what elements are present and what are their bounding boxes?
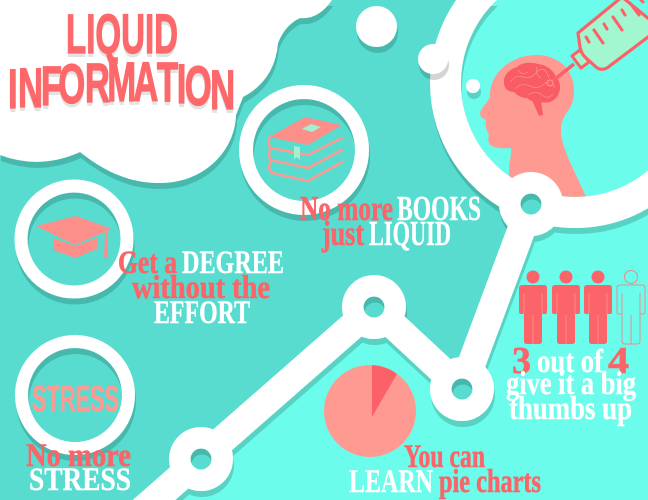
person 1 <box>519 270 547 344</box>
text: no more stress: STRESS <box>29 462 131 498</box>
text: 3 out of 4 give it a big thumbs up <box>506 340 636 427</box>
title text <box>8 2 235 121</box>
title text: INFORMATION <box>8 51 235 121</box>
text: 3 out of 4 give it a big thumbs up: 4 <box>608 340 629 382</box>
icon: books <box>269 117 342 181</box>
icon: head with brain and syringe <box>480 0 648 205</box>
text: you can learn pie charts: You can <box>404 439 485 475</box>
text: 3 out of 4 give it a big thumbs up: 3 <box>512 340 531 382</box>
bookmark <box>294 146 300 160</box>
text: get a degree without the effort: without the <box>132 270 270 306</box>
text: 3 out of 4 give it a big thumbs up: out of <box>537 344 604 380</box>
graph nodes <box>499 172 563 236</box>
text: get a degree without the effort: DEGREE <box>182 245 284 281</box>
magnifier ring <box>446 0 648 212</box>
book cover <box>269 117 342 145</box>
pie wedge <box>372 365 397 417</box>
cap tassel <box>104 232 108 258</box>
text: no more books just liquid: LIQUID <box>369 214 451 253</box>
text: get a degree without the effort: EFFORT <box>154 295 250 331</box>
person 4 outline <box>617 270 645 344</box>
head silhouette <box>480 55 590 205</box>
thought bubbles <box>356 6 480 93</box>
person 3 <box>584 270 612 344</box>
text: you can learn pie charts <box>349 439 541 500</box>
text: no more stress <box>26 438 131 498</box>
syringe tick marks <box>586 0 643 43</box>
cloud <box>0 0 332 183</box>
brain folds <box>510 67 555 97</box>
syringe barrel <box>578 0 648 69</box>
syringe tip ring in brain <box>547 80 553 86</box>
text: no more stress: No more <box>26 438 131 474</box>
graph line <box>130 204 531 500</box>
text: no more books just liquid: No more <box>300 189 393 228</box>
person 2 <box>552 270 580 344</box>
title shadow <box>8 6 235 125</box>
rising line graph with magnifier ring <box>130 0 648 500</box>
cap board <box>36 216 112 245</box>
text: no more books just liquid <box>300 189 481 253</box>
syringe needle <box>556 62 575 79</box>
book cover label <box>302 124 321 132</box>
people pictogram <box>519 270 645 344</box>
ring: books <box>246 92 362 208</box>
magnifier lens interior <box>461 0 648 197</box>
cap base <box>53 238 97 258</box>
text: no more books just liquid: BOOKS <box>397 189 481 228</box>
text: you can learn pie charts: LEARN <box>349 464 433 500</box>
title text: LIQUID <box>66 2 178 65</box>
book layers <box>269 137 342 181</box>
text: get a degree without the effort <box>118 245 284 331</box>
text: no more books just liquid: just <box>321 214 364 253</box>
brain <box>504 63 560 116</box>
title <box>8 2 235 125</box>
text: get a degree without the effort: Get a <box>118 245 177 281</box>
title shadow: INFORMATION <box>8 55 235 125</box>
text: you can learn pie charts: pie charts <box>439 464 541 500</box>
ring: degree <box>21 186 127 292</box>
syringe hub <box>572 50 589 68</box>
ring: stress <box>22 342 128 448</box>
pie base <box>324 365 416 457</box>
icon: graduation cap <box>36 216 112 258</box>
title shadow: LIQUID <box>66 6 178 69</box>
pie chart <box>324 365 416 457</box>
syringe <box>547 0 648 86</box>
graph line node holes <box>190 192 542 470</box>
stress word in ring: STRESS <box>32 378 119 419</box>
